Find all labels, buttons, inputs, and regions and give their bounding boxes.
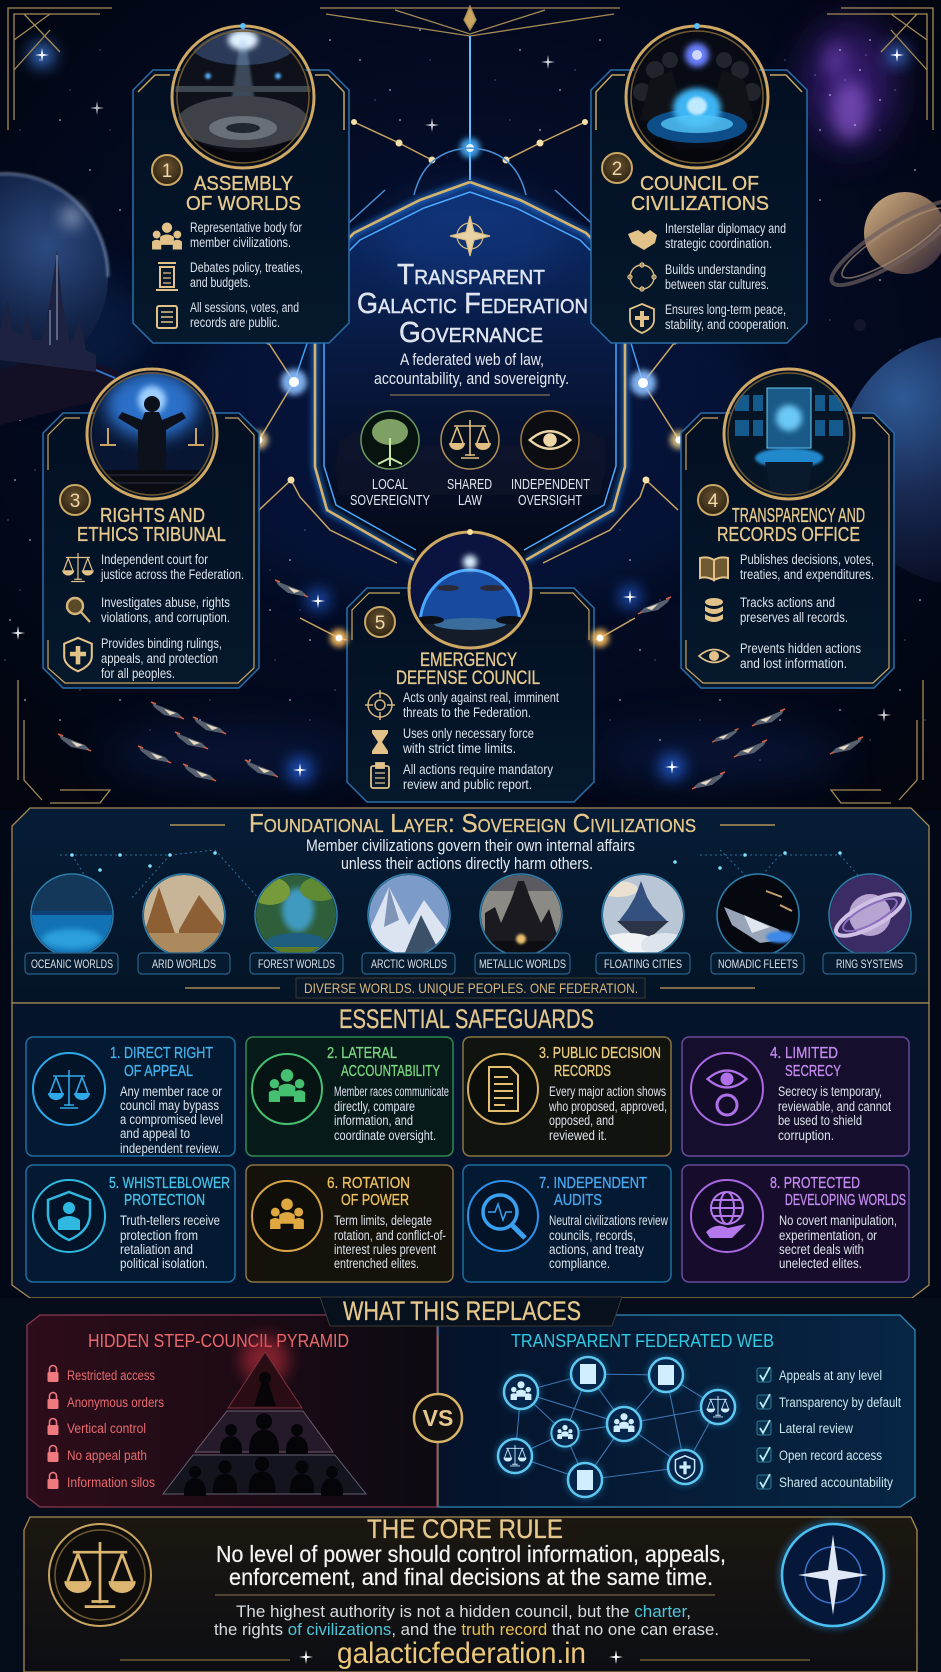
icon: record xyxy=(157,306,177,328)
card 7: independent audits: Neutral civilizations review xyxy=(549,1213,668,1228)
number badge xyxy=(602,153,632,183)
panel: transparent web: Open record access xyxy=(779,1448,882,1463)
body text xyxy=(100,552,244,681)
card 5: whistleblower protection: retaliation and xyxy=(120,1242,193,1257)
website: galacticfederation.in xyxy=(337,1637,586,1670)
section: foundational layer: RING SYSTEMS xyxy=(836,957,903,971)
icon: local sovereignty tree xyxy=(361,411,419,469)
body text: review and public report. xyxy=(403,777,532,792)
card 8: protected developing worlds xyxy=(682,1165,909,1282)
icon: open book xyxy=(700,557,728,580)
panel: hidden pyramid xyxy=(27,1315,437,1507)
card 4: limited secrecy: SECRECY xyxy=(785,1063,841,1080)
medallion: records archive xyxy=(727,372,851,496)
lock list xyxy=(48,1366,58,1489)
card 3: public decision records: opposed, and xyxy=(549,1113,614,1128)
heading: CIVILIZATIONS xyxy=(631,193,769,215)
section: foundational layer: ARID WORLDS xyxy=(152,957,216,971)
body text: for all peoples. xyxy=(101,666,175,681)
section: foundational layer xyxy=(12,808,929,1003)
card 3: public decision records: Every major action shows xyxy=(549,1084,666,1099)
subtitle xyxy=(374,351,569,388)
principle labels: LAW xyxy=(458,492,483,509)
icon: target network xyxy=(628,263,656,291)
card 6: rotation of power: entrenched elites. xyxy=(334,1256,419,1271)
panel: hidden pyramid: HIDDEN STEP-COUNCIL PYRAMID xyxy=(88,1331,349,1351)
panel: transparency and records office xyxy=(681,369,894,688)
section: essential safeguards xyxy=(12,1003,929,1298)
world: oceanic xyxy=(30,873,114,957)
body text: with strict time limits. xyxy=(402,741,516,756)
section: foundational layer: OCEANIC WORLDS xyxy=(31,957,113,971)
panel: hidden pyramid: No appeal path xyxy=(67,1448,147,1463)
number badge: 1 xyxy=(162,161,172,182)
body text: Representative body for xyxy=(190,220,302,235)
body text: Tracks actions and xyxy=(740,595,835,610)
heading: TRANSPARENCY AND xyxy=(732,505,865,527)
space background xyxy=(0,0,941,810)
card 4: limited secrecy: Secrecy is temporary, xyxy=(778,1084,882,1099)
card 5: whistleblower protection: Truth-tellers receive xyxy=(120,1213,220,1228)
panel: transparent web: Lateral review xyxy=(779,1421,853,1436)
card 6: rotation of power: interest rules prevent xyxy=(334,1242,436,1257)
left planet and city xyxy=(0,174,120,425)
heading: ASSEMBLY xyxy=(194,173,293,195)
principle labels: SOVEREIGNTY xyxy=(350,492,430,509)
intro text xyxy=(306,836,635,873)
panel: emergency defense council xyxy=(330,529,609,802)
panel: transparent web: Transparency by default xyxy=(779,1395,901,1410)
principle labels: INDEPENDENT xyxy=(511,476,590,493)
card 3: public decision records: RECORDS xyxy=(554,1063,611,1080)
card 2: lateral accountability: ACCOUNTABILITY xyxy=(341,1063,440,1080)
subtitle: accountability, and sovereignty. xyxy=(374,370,569,388)
medallion: council table xyxy=(629,29,765,165)
card 2: lateral accountability: Member races communicate xyxy=(334,1084,449,1099)
vs badge: VS xyxy=(423,1405,453,1431)
panel: hidden pyramid: Restricted access xyxy=(67,1368,155,1383)
panel: transparent web: Shared accountability xyxy=(779,1475,893,1490)
heading: RIGHTS AND xyxy=(100,505,205,527)
card 6: rotation of power: rotation, and conflict-of- xyxy=(334,1228,446,1243)
intro text: Member civilizations govern their own internal affairs xyxy=(306,836,635,855)
heading: DEFENSE COUNCIL xyxy=(396,668,540,689)
heading xyxy=(186,173,301,215)
world: arid xyxy=(142,873,226,957)
panel: assembly of worlds xyxy=(133,23,349,343)
medallion: assembly chamber xyxy=(175,29,311,165)
icon: hourglass xyxy=(372,730,388,754)
number badge xyxy=(698,485,728,515)
card 3: public decision records: 3. PUBLIC DECISION xyxy=(539,1045,661,1062)
medallion: defense dome xyxy=(411,534,529,646)
body text: stability, and cooperation. xyxy=(665,317,789,332)
section: foundational layer: ARCTIC WORLDS xyxy=(371,957,447,971)
top frame ornament xyxy=(8,6,933,803)
website xyxy=(120,1637,810,1670)
card 1: direct right of appeal: council may bypass xyxy=(120,1098,219,1113)
body text: Interstellar diplomacy and xyxy=(665,221,786,236)
card 8: protected developing worlds: 8. PROTECTED xyxy=(770,1175,860,1192)
panel: transparent web: TRANSPARENT FEDERATED WEB xyxy=(511,1331,774,1351)
medallion ring xyxy=(172,23,314,168)
body text: Independent court for xyxy=(101,552,208,567)
heading: ESSENTIAL SAFEGUARDS xyxy=(339,1004,594,1034)
card 7: independent audits xyxy=(463,1165,671,1282)
closing text: The highest authority is not a hidden council, but the charter, xyxy=(236,1603,691,1621)
panel: hidden pyramid: Vertical control xyxy=(67,1421,146,1436)
card 4: limited secrecy: corruption. xyxy=(778,1128,834,1143)
world: arctic xyxy=(367,873,451,957)
number badge: 3 xyxy=(70,491,80,512)
starships xyxy=(58,580,863,789)
card 2: lateral accountability: directly, compare xyxy=(334,1099,415,1114)
heading: ETHICS TRIBUNAL xyxy=(77,524,226,546)
medallion: tribunal statue xyxy=(90,371,214,500)
number badge xyxy=(365,607,395,637)
card 5: whistleblower protection: protection from xyxy=(120,1228,198,1243)
number badge xyxy=(60,485,90,515)
card 7: independent audits: councils, records, xyxy=(549,1228,636,1243)
section: foundational layer: FLOATING CITIES xyxy=(604,957,682,971)
card 6: rotation of power: Term limits, delegate xyxy=(334,1213,432,1228)
card 7: independent audits: AUDITS xyxy=(554,1192,602,1209)
checklist xyxy=(757,1367,771,1489)
card 5: whistleblower protection: 5. WHISTLEBLOWER xyxy=(109,1175,230,1192)
heading: OF WORLDS xyxy=(186,193,301,215)
card 3: public decision records xyxy=(463,1037,671,1156)
icon: blue compass xyxy=(778,1520,888,1630)
body text: and budgets. xyxy=(190,275,251,290)
principle labels: OVERSIGHT xyxy=(518,492,582,509)
core statement: No level of power should control information, appeals, xyxy=(216,1541,726,1567)
icon: target xyxy=(365,690,395,720)
body text: violations, and corruption. xyxy=(101,610,230,625)
body text: All actions require mandatory xyxy=(403,762,553,777)
card 4: limited secrecy xyxy=(682,1037,909,1156)
network xyxy=(495,1354,738,1500)
icon: database xyxy=(705,598,723,622)
panel: council of civilizations xyxy=(591,23,807,343)
icon: eye xyxy=(699,650,729,662)
panel: rights and ethics tribunal xyxy=(43,369,259,688)
world: metallic xyxy=(479,873,563,957)
principle labels xyxy=(350,476,590,509)
section: foundational layer: METALLIC WORLDS xyxy=(479,957,566,971)
card 1: direct right of appeal: independent review. xyxy=(120,1141,221,1156)
subtitle: A federated web of law, xyxy=(400,351,544,369)
card 2: lateral accountability: coordinate oversight. xyxy=(334,1128,436,1143)
heading: COUNCIL OF xyxy=(640,173,759,195)
heading xyxy=(717,505,865,546)
core statement xyxy=(216,1541,726,1590)
title: Governance xyxy=(399,317,543,349)
icon: independent oversight eye xyxy=(521,411,579,469)
panel: transparent web: Appeals at any level xyxy=(779,1368,882,1383)
card 2: lateral accountability: 2. LATERAL xyxy=(327,1045,397,1062)
connector nodes xyxy=(330,629,609,647)
section: foundational layer: FOREST WORLDS xyxy=(258,957,335,971)
right planets xyxy=(823,189,941,585)
central connector lines xyxy=(250,36,688,640)
number badge: 5 xyxy=(375,613,385,634)
panel: the core rule xyxy=(24,1514,917,1672)
world: ring systems xyxy=(828,873,912,957)
core statement: enforcement, and final decisions at the same time. xyxy=(229,1564,713,1590)
body text: appeals, and protection xyxy=(101,651,218,666)
card 6: rotation of power: 6. ROTATION xyxy=(327,1175,410,1192)
body text: Prevents hidden actions xyxy=(740,641,861,656)
body text xyxy=(190,220,303,330)
section: foundational layer: NOMADIC FLEETS xyxy=(718,957,798,971)
panel: transparent web xyxy=(438,1315,915,1507)
closing text: the rights of civilizations, and the truth record that no one can erase. xyxy=(214,1621,719,1639)
heading xyxy=(77,505,226,546)
body text: threats to the Federation. xyxy=(403,705,531,720)
icon: magnifier xyxy=(67,598,90,622)
icon: shared law scales xyxy=(441,411,499,469)
body text: Investigates abuse, rights xyxy=(101,595,230,610)
card 5: whistleblower protection: political isolation. xyxy=(120,1256,208,1271)
body text: treaties, and expenditures. xyxy=(740,567,874,582)
world: floating cities xyxy=(601,873,685,952)
tagline: DIVERSE WORLDS. UNIQUE PEOPLES. ONE FEDERATION. xyxy=(304,980,638,996)
title: Transparent xyxy=(397,259,545,291)
principle labels: LOCAL xyxy=(372,476,408,493)
card 4: limited secrecy: be used to shield xyxy=(778,1113,862,1128)
heading xyxy=(396,650,540,689)
body text: Uses only necessary force xyxy=(403,726,534,741)
body text: between star cultures. xyxy=(665,277,769,292)
pyramid xyxy=(163,1336,366,1496)
icon: shield xyxy=(64,638,92,671)
number badge xyxy=(152,155,182,185)
card 3: public decision records: reviewed it. xyxy=(549,1128,607,1143)
card 1: direct right of appeal: OF APPEAL xyxy=(124,1063,193,1080)
card 1: direct right of appeal: 1. DIRECT RIGHT xyxy=(110,1045,213,1062)
icon: gold scales xyxy=(49,1524,151,1626)
body text: justice across the Federation. xyxy=(100,567,244,582)
card 1: direct right of appeal xyxy=(26,1037,235,1156)
principle labels: SHARED xyxy=(447,476,492,493)
medallion ring xyxy=(409,529,531,648)
body text: preserves all records. xyxy=(740,610,848,625)
section: what this replaces background xyxy=(0,1298,941,1672)
central shield panel xyxy=(315,182,625,560)
card 1: direct right of appeal: Any member race or xyxy=(120,1084,222,1099)
body text xyxy=(665,221,789,332)
card 7: independent audits: actions, and treaty xyxy=(549,1242,644,1257)
closing text xyxy=(214,1603,719,1639)
card 6: rotation of power: OF POWER xyxy=(341,1192,409,1209)
title xyxy=(357,259,588,349)
icon: handshake xyxy=(628,230,657,250)
body text: Publishes decisions, votes, xyxy=(740,552,874,567)
intro text: unless their actions directly harm others. xyxy=(341,854,593,873)
tagline xyxy=(185,978,755,998)
icon: people xyxy=(152,222,182,250)
body text: and lost information. xyxy=(740,656,847,671)
body text xyxy=(740,552,874,671)
body text: member civilizations. xyxy=(190,235,291,250)
body text: strategic coordination. xyxy=(665,236,772,251)
card 7: independent audits: 7. INDEPENDENT xyxy=(539,1175,647,1192)
number badge: 2 xyxy=(612,159,622,180)
heading: RECORDS OFFICE xyxy=(717,524,860,546)
icon: shield xyxy=(630,304,654,333)
medallion ring xyxy=(626,23,768,168)
world: forest xyxy=(254,873,338,952)
world labels xyxy=(25,953,916,974)
panel: hidden pyramid: Anonymous orders xyxy=(67,1395,164,1410)
icon: clipboard xyxy=(371,763,389,788)
card 4: limited secrecy: reviewable, and cannot xyxy=(778,1099,891,1114)
card 8: protected developing worlds: unelected elites. xyxy=(779,1256,862,1271)
vs badge xyxy=(414,1335,462,1505)
heading: THE CORE RULE xyxy=(367,1514,563,1544)
body text: Ensures long-term peace, xyxy=(665,302,786,317)
heading xyxy=(631,173,769,215)
card 7: independent audits: compliance. xyxy=(549,1256,610,1271)
card 8: protected developing worlds: secret deals with xyxy=(779,1242,864,1257)
body text: Provides binding rulings, xyxy=(101,636,222,651)
body text: All sessions, votes, and xyxy=(190,300,299,315)
heading: what this replaces: WHAT THIS REPLACES xyxy=(343,1296,581,1326)
body text: Builds understanding xyxy=(665,262,766,277)
body text: records are public. xyxy=(190,315,280,330)
number badge: 4 xyxy=(708,491,719,512)
card 2: lateral accountability: information, and xyxy=(334,1113,413,1128)
card 1: direct right of appeal: and appeal to xyxy=(120,1126,190,1141)
icon: pillar xyxy=(156,263,178,290)
panel: hidden pyramid: Information silos xyxy=(67,1475,155,1490)
card 6: rotation of power xyxy=(246,1165,453,1282)
body text: Acts only against real, imminent xyxy=(403,690,559,705)
ornaments xyxy=(170,824,775,826)
card 3: public decision records: who proposed, approved, xyxy=(548,1099,667,1114)
card 5: whistleblower protection xyxy=(26,1165,235,1282)
medallion ring xyxy=(724,369,854,499)
card 8: protected developing worlds: experimentation, or xyxy=(779,1228,877,1243)
icon: compass star xyxy=(450,216,490,256)
world: nomadic fleets xyxy=(716,873,800,957)
card 8: protected developing worlds: No covert manipulation, xyxy=(779,1213,897,1228)
heading: Foundational Layer: Sovereign Civilizations xyxy=(249,808,696,838)
card 5: whistleblower protection: PROTECTION xyxy=(124,1192,205,1209)
heading: EMERGENCY xyxy=(420,650,517,671)
medallion ring xyxy=(87,369,217,499)
icon: scales xyxy=(62,553,94,582)
card 1: direct right of appeal: a compromised level xyxy=(120,1112,223,1127)
card 2: lateral accountability xyxy=(246,1037,453,1156)
body text xyxy=(402,690,559,792)
title: Galactic Federation xyxy=(357,288,588,320)
body text: Debates policy, treaties, xyxy=(190,260,303,275)
card 4: limited secrecy: 4. LIMITED xyxy=(770,1045,838,1062)
